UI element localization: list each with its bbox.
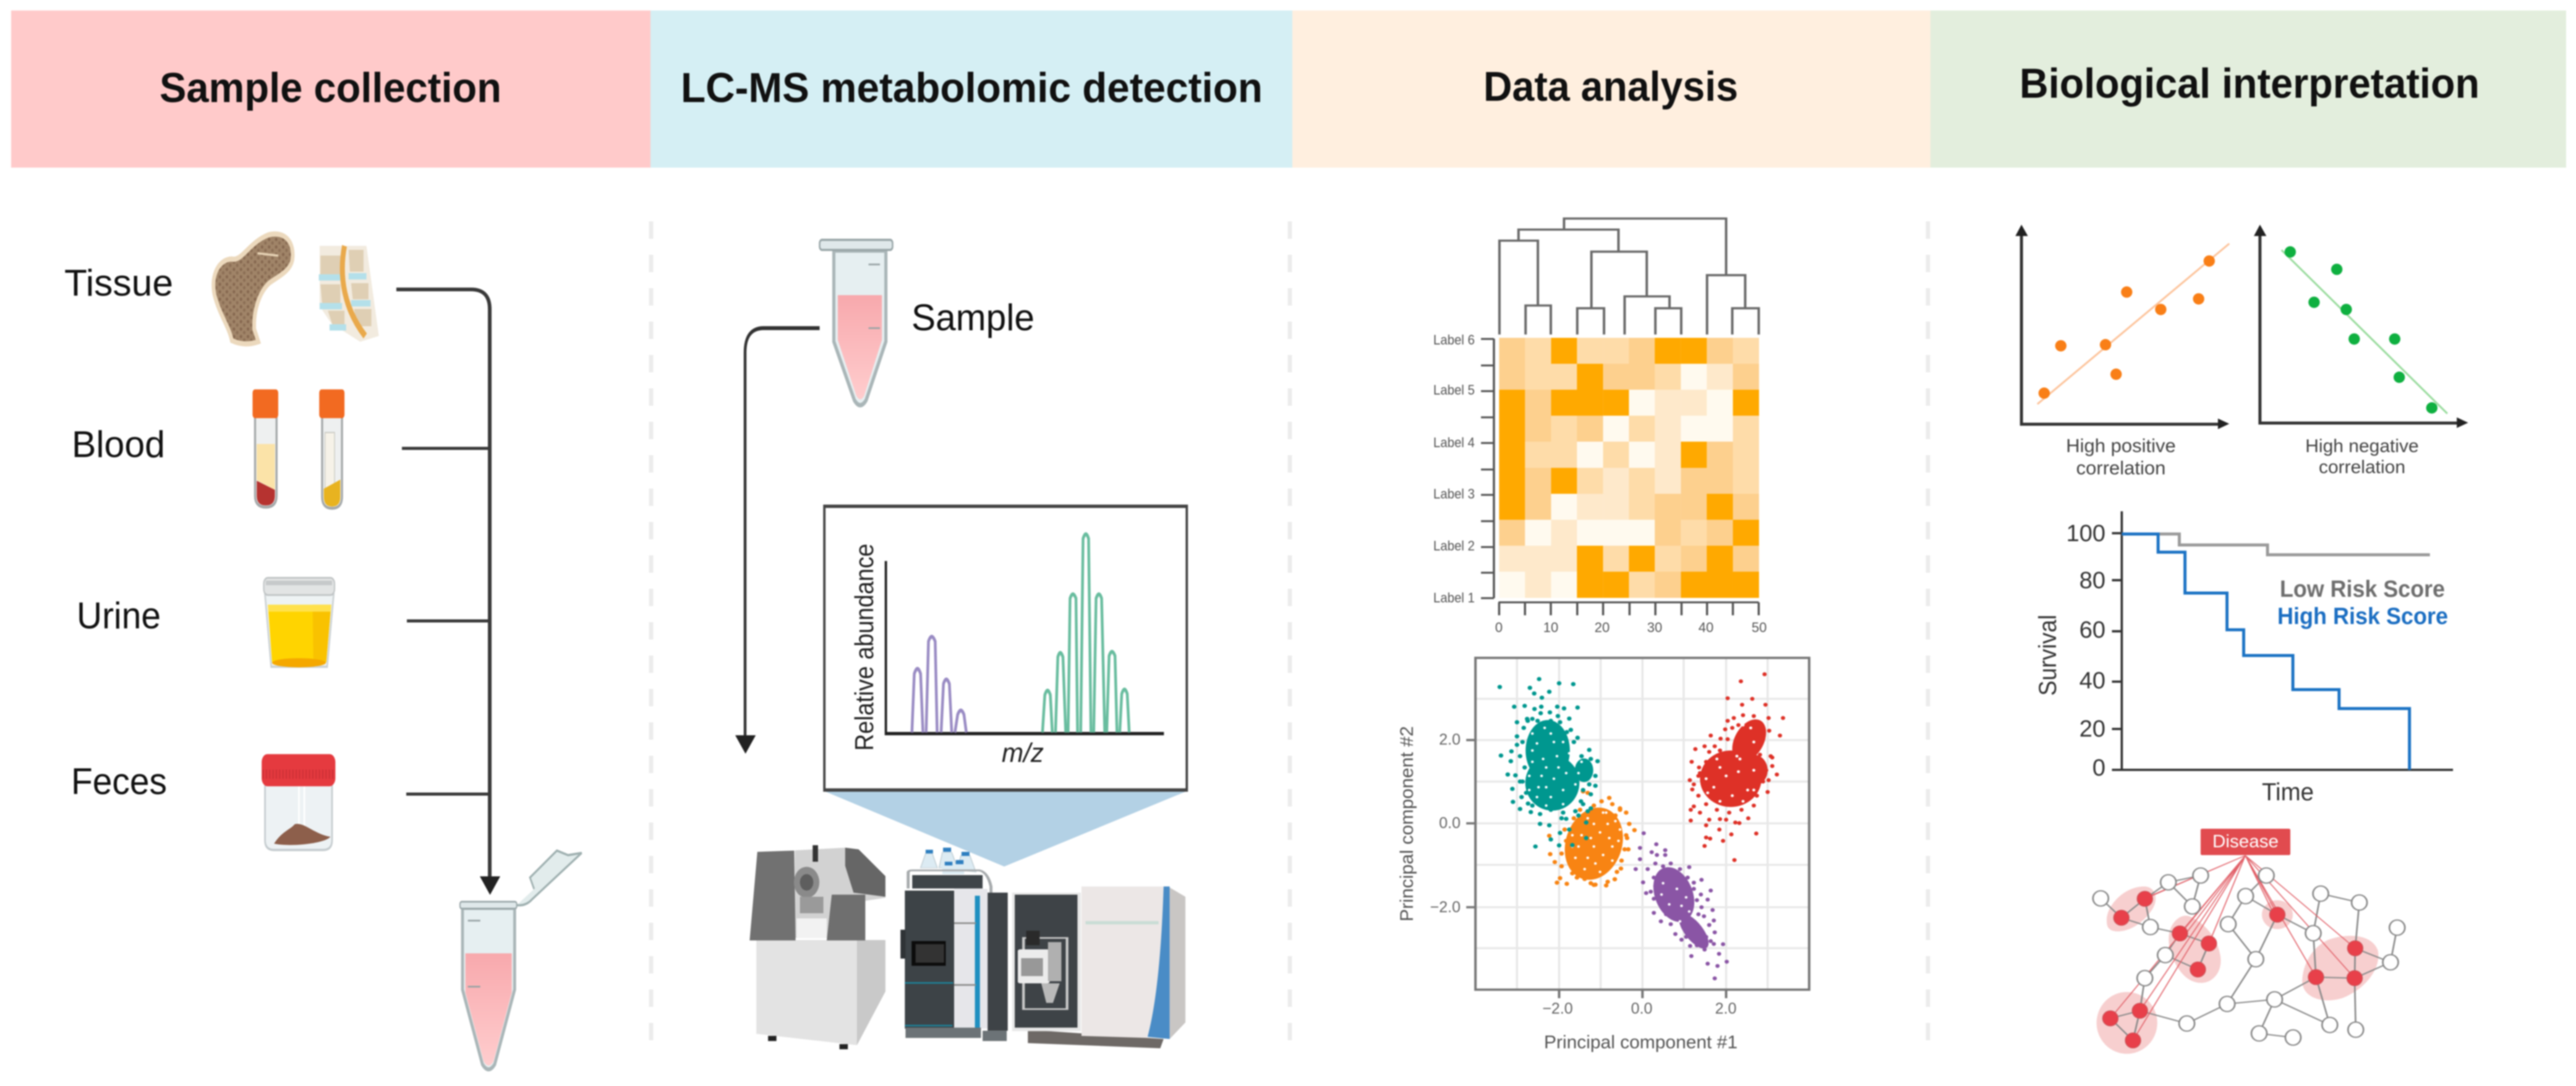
correlation caption: positive: correlation bbox=[2076, 457, 2165, 479]
label: Sample: Sample bbox=[911, 297, 1034, 338]
header: Sample collection: Sample collection bbox=[160, 64, 501, 111]
icon: LC stack with bottles bbox=[900, 848, 1008, 1041]
disease box bbox=[2201, 829, 2290, 855]
survival tick labels: 20 bbox=[2079, 716, 2105, 742]
header: Biological interpretation bbox=[1930, 11, 2566, 168]
icon: microtube with open lid bbox=[460, 850, 582, 1069]
dendrogram bbox=[1499, 218, 1759, 335]
icon: serum tube bbox=[319, 390, 344, 508]
chart: positive correlation bbox=[2015, 224, 2229, 429]
PCA tick labels: 0.0 bbox=[1631, 1000, 1652, 1017]
survival y label: Survival bbox=[2034, 615, 2062, 696]
PCA x axis title: Principal component #1 bbox=[1544, 1032, 1738, 1053]
arrow: collection lines into tube bbox=[396, 289, 500, 895]
heatmap labels: Label 2 bbox=[1433, 538, 1475, 554]
green peaks bbox=[1043, 534, 1129, 732]
chart: negative correlation bbox=[2254, 224, 2468, 428]
network edges bbox=[2100, 876, 2397, 1040]
purple peaks bbox=[912, 637, 966, 732]
header: Sample collection bbox=[11, 11, 650, 168]
icon: urine cup bbox=[264, 578, 335, 667]
heatmap labels: Label 3 bbox=[1433, 486, 1475, 502]
heatmap labels: Label 1 bbox=[1433, 590, 1475, 605]
mass spectrum box bbox=[824, 507, 1187, 790]
panel: data analysis bbox=[1397, 218, 1809, 1053]
survival tick labels: 60 bbox=[2079, 617, 2105, 643]
heatmap labels: Label 5 bbox=[1433, 382, 1475, 398]
PCA tick labels: 2.0 bbox=[1715, 1000, 1736, 1017]
heatmap grid bbox=[1499, 338, 1759, 598]
panel: LC-MS detection bbox=[735, 240, 1187, 1050]
icon: blood tube with plasma and red cells bbox=[252, 390, 278, 507]
grid bbox=[1475, 659, 1809, 989]
icon: feces jar bbox=[262, 754, 335, 850]
header: Data analysis: Data analysis bbox=[1483, 63, 1738, 110]
survival tick labels bbox=[2066, 521, 2105, 781]
heatmap labels: 50 bbox=[1752, 620, 1767, 635]
survival tick labels: 80 bbox=[2079, 568, 2105, 594]
label: Blood: Blood bbox=[72, 424, 165, 465]
PCA tick labels: 2.0 bbox=[1439, 731, 1461, 748]
PCA scatter plot bbox=[1466, 658, 1809, 998]
disease network bbox=[2093, 829, 2405, 1054]
header: Biological interpretation: Biological interpretation bbox=[2019, 60, 2480, 107]
label: Tissue: Tissue bbox=[64, 262, 173, 304]
cluster: red bbox=[1690, 674, 1783, 860]
heatmap labels bbox=[1433, 332, 1767, 635]
cluster: teal bbox=[1499, 679, 1598, 847]
heatmap labels: 40 bbox=[1699, 620, 1713, 635]
highlighted modules bbox=[2097, 886, 2378, 1054]
heatmap labels: 20 bbox=[1595, 620, 1610, 635]
heatmap with dendrogram bbox=[1481, 218, 1759, 615]
plot frame and ticks bbox=[1466, 658, 1809, 998]
cluster: orange bbox=[1550, 792, 1634, 886]
icon: femur bone bbox=[213, 234, 292, 344]
survival tick labels: 0 bbox=[2092, 755, 2105, 781]
PCA tick labels: 0.0 bbox=[1439, 814, 1461, 832]
PCA tick labels: −2.0 bbox=[1430, 899, 1461, 916]
axis label: relative abundance: Relative abundance bbox=[850, 544, 879, 751]
survival tick labels: 40 bbox=[2079, 668, 2105, 694]
header: LC-MS metabolomic detection bbox=[650, 11, 1292, 168]
chart: survival curves bbox=[2112, 511, 2453, 770]
label: Feces: Feces bbox=[71, 761, 167, 802]
heatmap labels: 30 bbox=[1647, 620, 1662, 635]
heatmap axes bbox=[1481, 339, 1759, 615]
label: Urine: Urine bbox=[77, 595, 161, 636]
heatmap labels: 0 bbox=[1495, 620, 1503, 635]
arrow: sample to instrument bbox=[735, 328, 820, 754]
icon: spine section bbox=[319, 246, 379, 342]
survival x label: Time bbox=[2262, 779, 2314, 806]
icon: left mass spectrometer bbox=[749, 845, 885, 1050]
PCA tick labels bbox=[1430, 731, 1736, 1017]
heatmap labels: Label 4 bbox=[1433, 435, 1475, 450]
icon: sample microtube bbox=[820, 240, 893, 405]
PCA y axis title: Principal component #2 bbox=[1397, 726, 1417, 921]
icon: right mass spectrometer bbox=[1012, 886, 1185, 1048]
legend: Low Risk Score: Low Risk Score bbox=[2280, 576, 2445, 602]
header: LC-MS metabolomic detection: LC-MS metabolomic detection bbox=[681, 64, 1263, 111]
correlation caption: negative: High negative bbox=[2305, 436, 2419, 456]
header: Data analysis bbox=[1292, 11, 1930, 168]
correlation caption: positive: High positive bbox=[2066, 435, 2176, 456]
legend: High Risk Score: High Risk Score bbox=[2277, 604, 2448, 630]
disease label: Disease bbox=[2212, 832, 2279, 852]
survival tick labels: 100 bbox=[2066, 521, 2105, 547]
red nodes bbox=[2102, 891, 2363, 1048]
disease links bbox=[2110, 855, 2355, 1040]
panel: biological interpretation bbox=[2015, 224, 2468, 1054]
connector wedge bbox=[824, 791, 1187, 866]
white nodes bbox=[2093, 868, 2405, 1045]
heatmap labels: 10 bbox=[1543, 620, 1558, 635]
panel: sample collection bbox=[64, 234, 582, 1069]
axis label: m/z: m/z bbox=[1002, 738, 1044, 768]
heatmap labels: Label 6 bbox=[1433, 332, 1475, 348]
correlation caption: negative: correlation bbox=[2319, 457, 2405, 477]
cluster: purple bbox=[1636, 833, 1727, 978]
PCA tick labels: −2.0 bbox=[1542, 1000, 1573, 1017]
